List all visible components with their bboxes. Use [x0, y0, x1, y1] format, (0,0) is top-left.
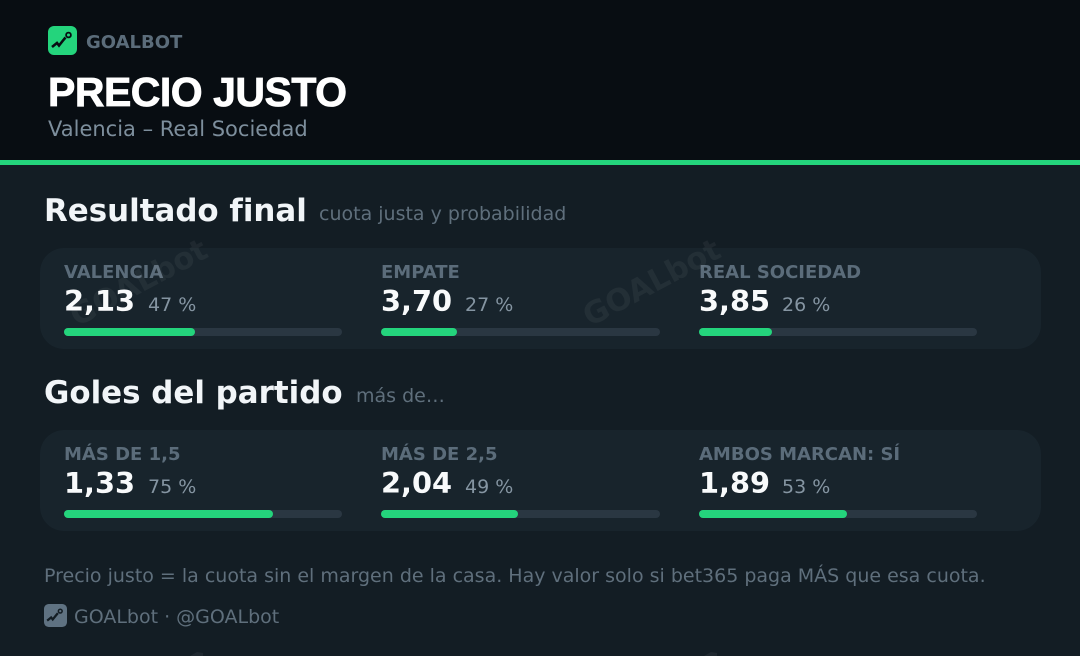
item: valencia: 2,13: [64, 284, 135, 318]
footer credit: GOALbot · @GOALbot: [74, 606, 279, 628]
item: ambos marcan: AMBOS MARCAN: SÍ: [699, 444, 900, 465]
title: PRECIO JUSTO: [48, 69, 347, 115]
panel: goles del partido: [40, 430, 1041, 531]
item: empate: 27 %: [465, 294, 513, 316]
item: ambos marcan: 1,89: [699, 466, 770, 500]
item: ambos marcan: [699, 444, 977, 518]
item: real sociedad: [699, 262, 977, 336]
header band: [0, 0, 1080, 165]
item: valencia: 47 %: [148, 294, 196, 316]
watermark layer: GOALbot: [577, 232, 727, 334]
icon: goalbot logo: [48, 26, 77, 55]
item: mas de 1,5: [64, 444, 342, 518]
item: mas de 2,5: 2,04: [381, 466, 452, 500]
item: mas de 2,5: [381, 444, 660, 518]
item: mas de 1,5: 1,33: [64, 466, 135, 500]
icon: footer logo: [44, 604, 67, 627]
item: ambos marcan: 53 %: [782, 476, 830, 498]
item: mas de 1,5: 75 %: [148, 476, 196, 498]
panel: resultado final: [40, 248, 1041, 349]
footnote: Precio justo = la cuota sin el margen de la casa. Hay valor solo si bet365 paga MÁS que esa cuota.: [44, 565, 986, 587]
item: empate: [381, 262, 660, 336]
item: mas de 2,5: MÁS DE 2,5: [381, 444, 497, 465]
item: mas de 2,5: 49 %: [465, 476, 513, 498]
item: valencia: VALENCIA: [64, 262, 163, 283]
item: empate: 3,70: [381, 284, 452, 318]
item: mas de 1,5: MÁS DE 1,5: [64, 444, 180, 465]
item: real sociedad: 3,85: [699, 284, 770, 318]
section heading: resultado final: Resultado final: [44, 193, 307, 229]
green header rule: [0, 160, 1080, 165]
subtitle: match: Valencia – Real Sociedad: [48, 117, 308, 141]
item: valencia: [64, 262, 342, 336]
item: real sociedad: 26 %: [782, 294, 830, 316]
item: empate: EMPATE: [381, 262, 460, 283]
brand name: GOALBOT: [86, 32, 182, 53]
section note: resultado final: cuota justa y probabilidad: [319, 203, 566, 225]
section note: goles: más de…: [356, 385, 445, 407]
watermark layer: GOALbot: [64, 232, 214, 334]
section heading: goles del partido: Goles del partido: [44, 375, 343, 411]
item: real sociedad: REAL SOCIEDAD: [699, 262, 861, 283]
